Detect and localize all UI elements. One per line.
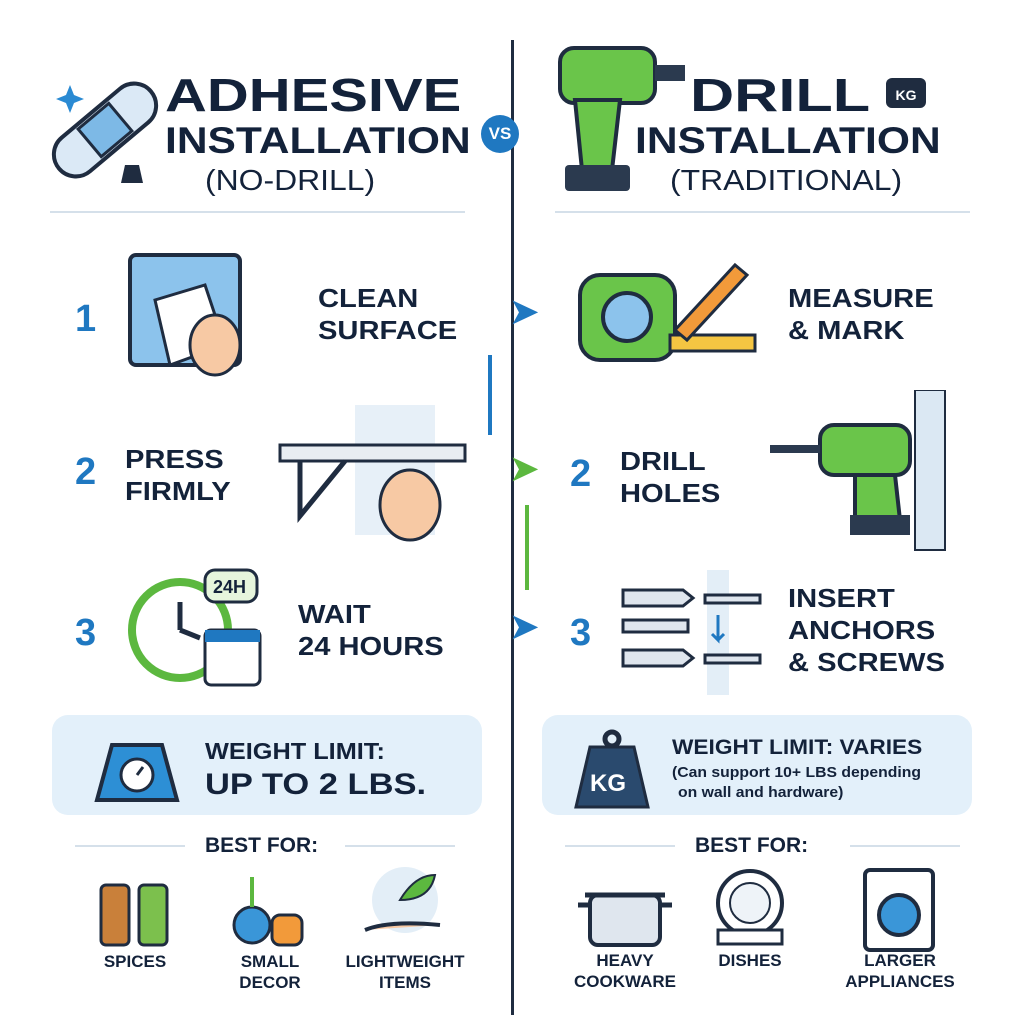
step 1 right: & MARK	[788, 315, 904, 345]
step 2 left: PRESS	[125, 444, 224, 474]
icon: kg weight	[574, 730, 650, 808]
step 1 right: MEASURE	[788, 283, 934, 313]
panel: weight left: WEIGHT LIMIT:	[205, 738, 385, 764]
title: drill: (TRADITIONAL)	[670, 165, 902, 197]
title: drill: DRILL	[690, 69, 870, 121]
title: drill	[635, 69, 941, 197]
step 1 left: SURFACE	[318, 315, 457, 345]
items right: COOKWARE	[574, 972, 676, 991]
panel: weight right: on wall and hardware)	[678, 784, 843, 801]
items left	[100, 867, 464, 992]
step 2 right: 2	[570, 453, 591, 495]
text: ➤	[510, 608, 538, 646]
icon: clock calendar	[128, 568, 262, 686]
step 3 right: INSERT	[788, 583, 895, 613]
divider	[511, 40, 514, 1015]
title: drill: INSTALLATION	[635, 120, 941, 161]
items right: APPLIANCES	[845, 972, 955, 991]
text: ➤	[510, 293, 538, 331]
icon: kg weight: KG	[590, 770, 626, 797]
items left: SPICES	[104, 952, 166, 971]
icon: cleaning	[128, 253, 242, 376]
icon: bandage	[52, 82, 158, 183]
step 1 right	[578, 262, 934, 362]
panel: weight right	[542, 715, 972, 815]
best for right: BEST FOR:	[695, 834, 808, 857]
items left: ITEMS	[379, 973, 431, 992]
items right: DISHES	[718, 951, 782, 970]
icon: drill title	[558, 46, 685, 191]
panel: weight right: (Can support 10+ LBS depending	[672, 764, 921, 781]
icon: spices	[100, 884, 168, 946]
icon: dishes	[716, 869, 784, 946]
title: adhesive: INSTALLATION	[165, 120, 471, 161]
step 2 right: HOLES	[620, 478, 720, 508]
vs badge: VS	[489, 124, 511, 143]
step 3 left: WAIT	[298, 599, 371, 629]
icon: pot	[578, 892, 672, 947]
items left: SMALL	[241, 952, 299, 971]
best for left: BEST FOR:	[205, 834, 318, 857]
step 1 left	[75, 253, 457, 376]
step 2 left: 2	[75, 451, 96, 493]
items right: LARGER	[864, 951, 936, 970]
title: adhesive: (NO-DRILL)	[205, 165, 375, 197]
step 2 left: FIRMLY	[125, 476, 231, 506]
panel: weight right: WEIGHT LIMIT: VARIES	[672, 736, 922, 759]
items left: DECOR	[239, 973, 301, 992]
title: adhesive	[165, 69, 471, 197]
icon: decor	[232, 877, 304, 946]
icon: shelf press	[278, 405, 466, 542]
icon: kg weight small	[886, 78, 926, 108]
icon: washer	[863, 868, 935, 952]
icon: tape measure	[578, 262, 756, 362]
step 1 left: CLEAN	[318, 283, 418, 313]
text: ➤	[510, 450, 538, 488]
vs badge	[481, 115, 519, 153]
panel: weight left: UP TO 2 LBS.	[205, 768, 426, 801]
step 3 left: 24 HOURS	[298, 631, 444, 661]
panel: weight left	[52, 715, 482, 815]
icon: clock calendar: 24H	[213, 577, 246, 597]
step 2 left	[75, 405, 466, 542]
arrows center	[488, 355, 492, 435]
step 1 left: 1	[75, 298, 96, 340]
step 2 right: DRILL	[620, 446, 706, 476]
step 3 left	[75, 568, 444, 686]
step 3 right: & SCREWS	[788, 647, 945, 677]
step 2 right	[570, 390, 946, 551]
items right	[574, 868, 955, 991]
icon: scale	[94, 743, 180, 802]
items left: LIGHTWEIGHT	[346, 952, 464, 971]
step 3 left: 3	[75, 612, 96, 654]
step 3 right	[570, 570, 945, 695]
icon: drill wall	[770, 390, 946, 551]
step 3 right: ANCHORS	[788, 615, 935, 645]
title: adhesive: ADHESIVE	[165, 69, 461, 121]
icon: anchors screws	[622, 570, 762, 695]
icon: hand leaf	[364, 867, 440, 933]
step 3 right: 3	[570, 612, 591, 654]
items right: HEAVY	[596, 951, 654, 970]
icon: kg weight small: KG	[896, 87, 916, 103]
